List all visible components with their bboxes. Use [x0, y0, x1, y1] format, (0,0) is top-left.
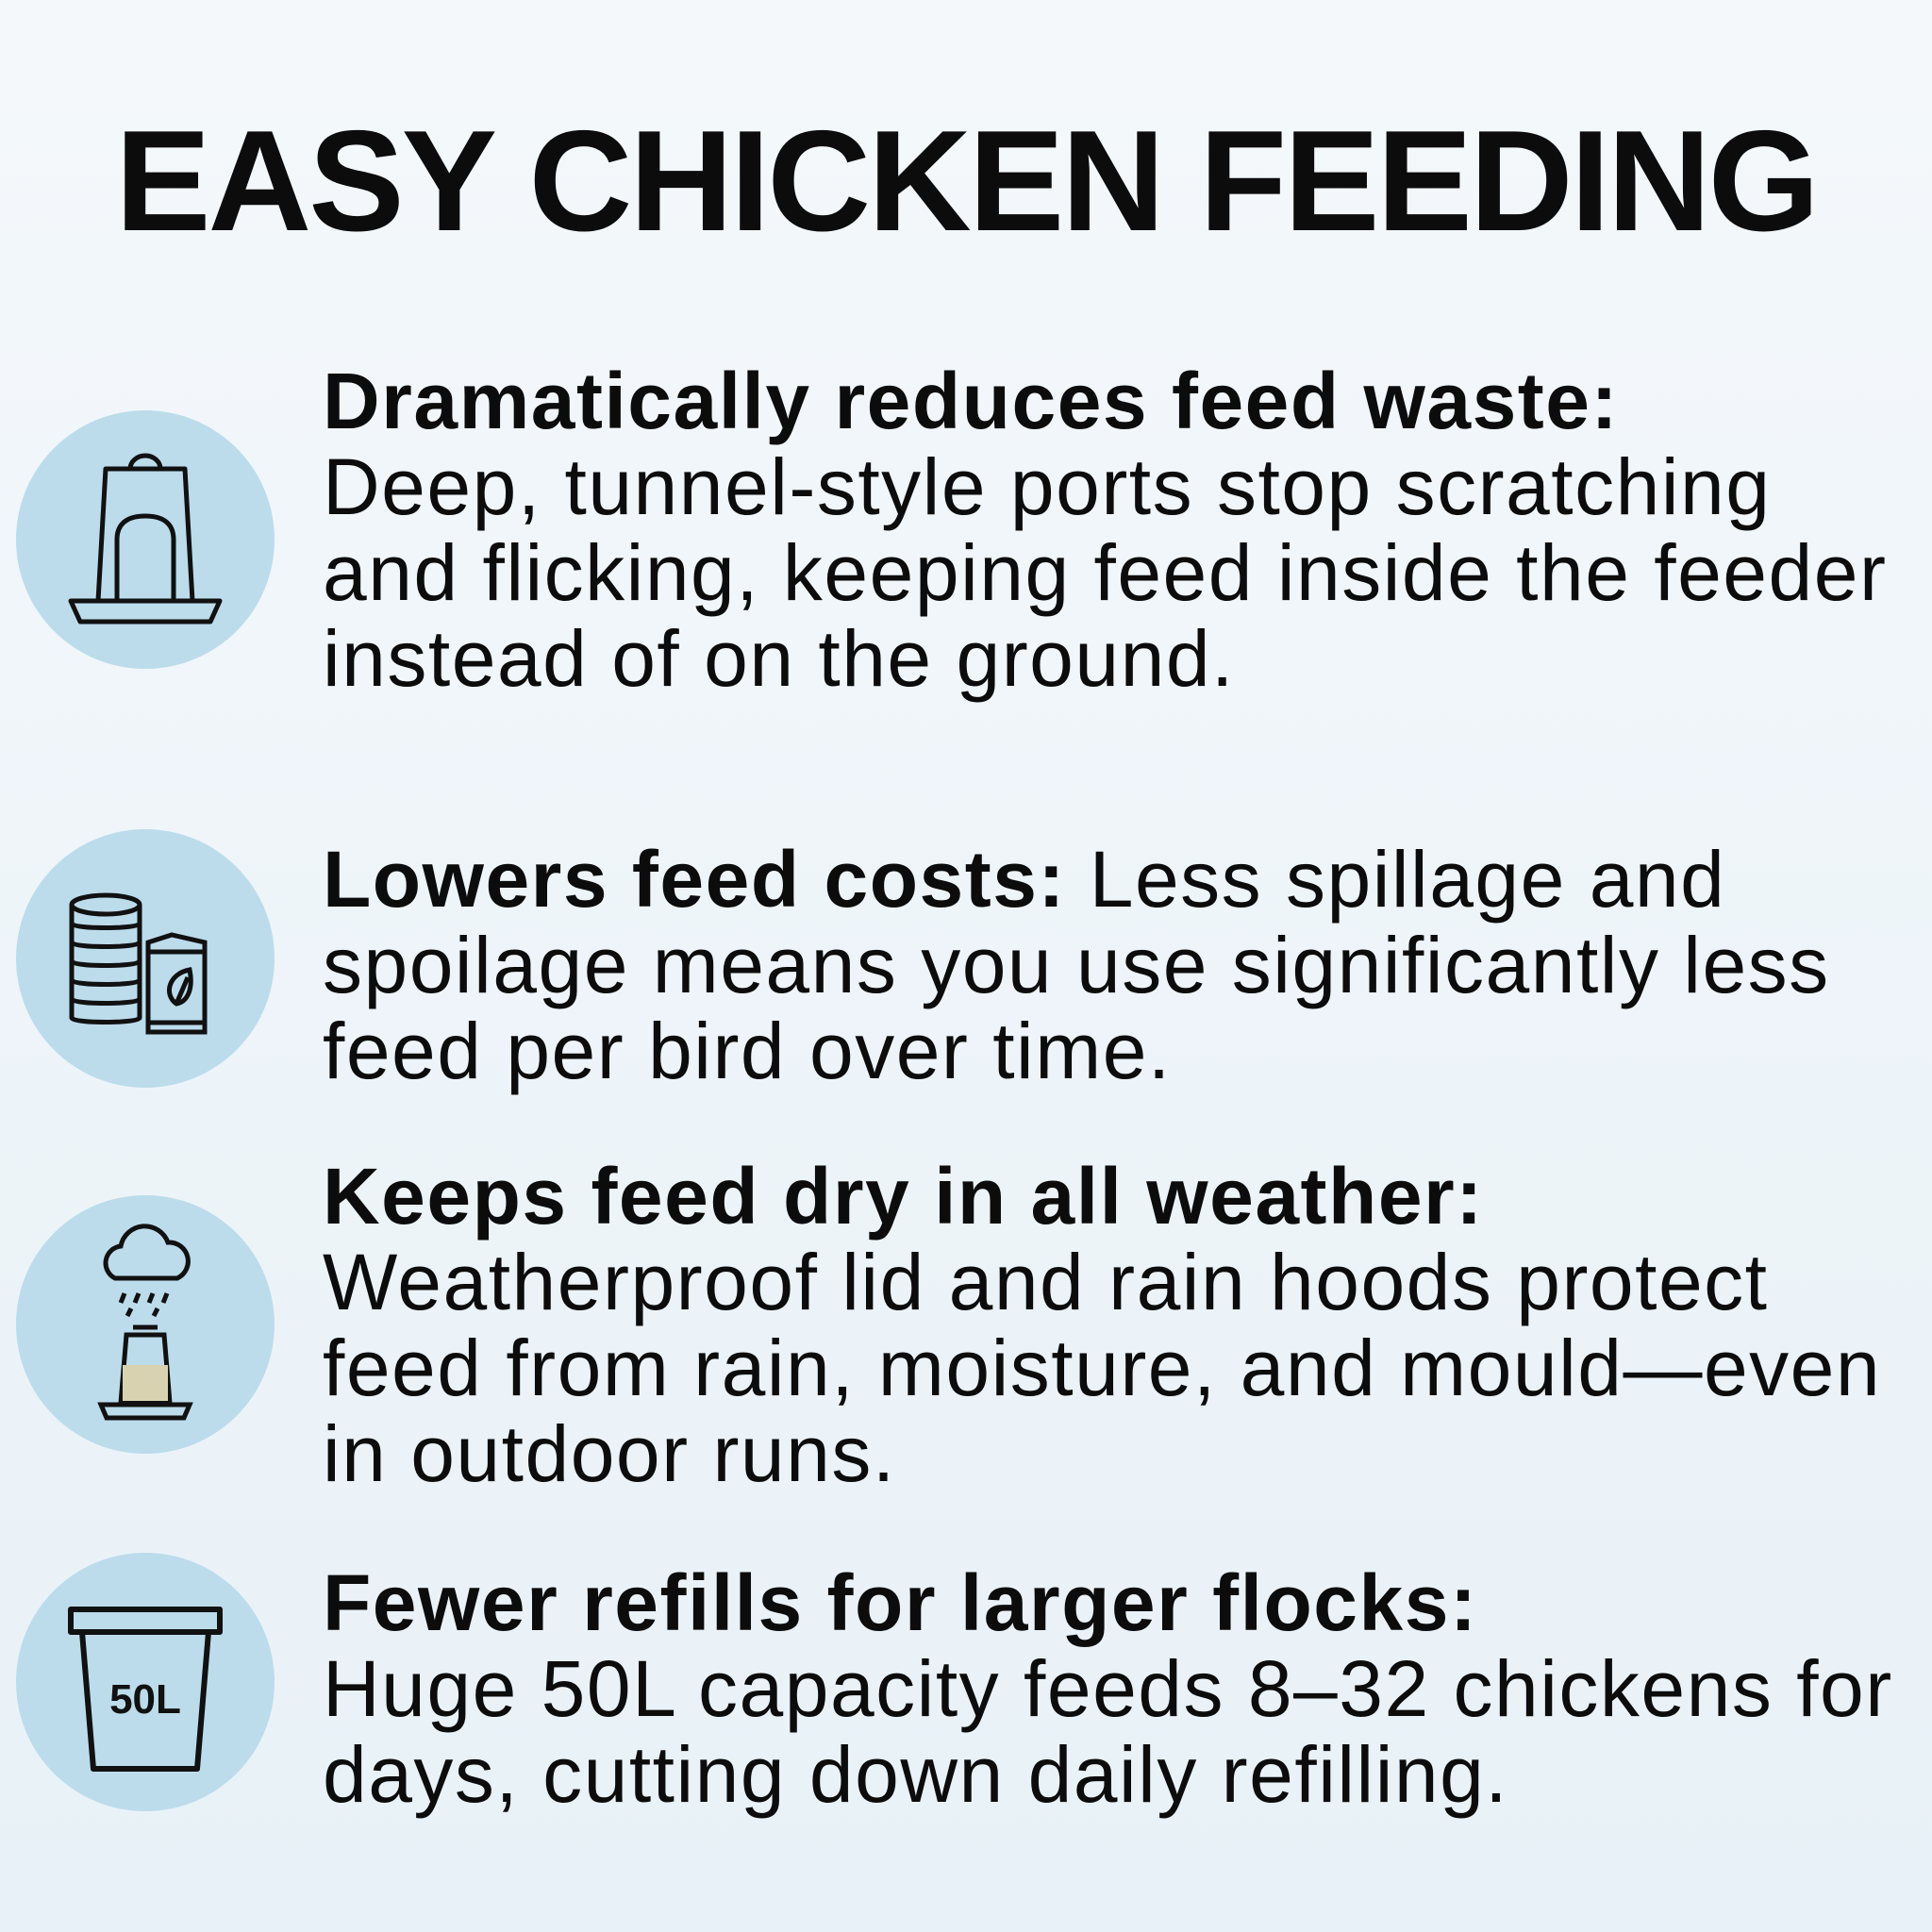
text: dry: Keeps feed dry in all weather: — [323, 1152, 1484, 1241]
text: refills: Huge 50L capacity feeds 8–32 chickens for — [323, 1644, 1893, 1733]
icon: 50L container — [16, 1553, 275, 1811]
text: dry: Weatherproof lid and rain hoods protect — [323, 1238, 1769, 1326]
text: refills: Fewer refills for larger flocks: — [323, 1558, 1477, 1647]
text: costs: Lowers feed costs: Less spillage and — [323, 835, 1725, 924]
text: dry: feed from rain, moisture, and mould—even — [323, 1324, 1881, 1412]
text: dry: in outdoor runs. — [323, 1409, 896, 1498]
text: dry — [323, 1152, 1881, 1498]
icon: coins and bag — [16, 829, 275, 1088]
text: costs: feed per bird over time. — [323, 1007, 1172, 1095]
title: EASY CHICKEN FEEDING — [115, 101, 1817, 261]
icon: 50L container: 50L — [109, 1676, 181, 1723]
text: refills: days, cutting down daily refilling. — [323, 1730, 1508, 1819]
icon: rain and feeder — [16, 1195, 275, 1454]
text: waste — [323, 357, 1887, 703]
text: waste: Deep, tunnel-style ports stop scratching — [323, 442, 1771, 531]
text: waste: and flicking, keeping feed inside the feeder — [323, 528, 1887, 617]
text: waste: instead of on the ground. — [323, 614, 1235, 703]
text: refills — [323, 1558, 1893, 1819]
text: costs: spoilage means you use significantly less — [323, 921, 1830, 1009]
text: costs — [323, 835, 1830, 1095]
icon: feeder — [16, 410, 275, 669]
text: waste: Dramatically reduces feed waste: — [323, 357, 1619, 445]
